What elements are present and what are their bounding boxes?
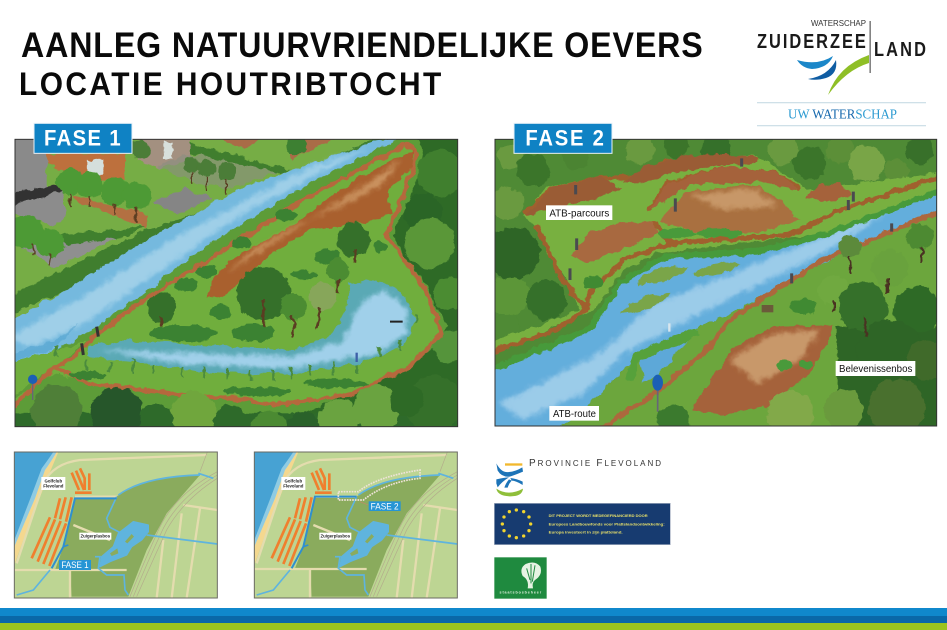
lower mound [689,324,833,415]
title: AANLEG NATUURVRIENDELIJKE OEVERS [21,27,703,65]
logo: Provincie Flevoland: PROVINCIE FLEVOLAND [529,458,661,469]
map label: Golfclub Flevoland: Flevoland [283,484,304,489]
fase 2 label [514,123,612,153]
map label: Zuigerplasbos [79,533,111,540]
map label: Golfclub Flevoland: Flevoland [43,484,64,489]
logo: Waterschap Zuiderzeeland [757,18,926,126]
map label: Golfclub Flevoland [41,477,65,490]
logo: Waterschap Zuiderzeeland: UW WATERSCHAP [788,106,897,122]
label: ATB-route [549,406,599,421]
logo: Waterschap Zuiderzeeland: WATERSCHAP [811,18,866,28]
title: LOCATIE HOUTRIBTOCHT [19,66,441,102]
map: fase 1 [14,452,217,598]
reeds [57,313,417,380]
map label: fase 2: FASE 2 [371,501,399,511]
mounds [525,155,852,290]
map label: Golfclub Flevoland [281,477,305,490]
foreground trees [16,384,400,426]
foreground bushes [657,248,925,438]
forest lower right [790,223,936,426]
canal [7,137,402,363]
logo: Waterschap Zuiderzeeland: ZUIDERZEE [757,29,866,52]
map: fase 2 [254,452,457,598]
map label: Golfclub Flevoland: Golfclub [285,478,302,483]
panel: fase 2 illustration [487,123,947,438]
icon: EU stars [501,508,532,539]
map label: Golfclub Flevoland: Golfclub [45,478,62,483]
lower bank [560,212,936,426]
banner: EU financing: Europees Landbouwfonds voor Plattelandsontwikkeling: [549,522,665,527]
label: Belevenissenbos: Belevenissenbos [839,364,912,375]
pond [88,279,416,374]
label: Belevenissenbos [836,361,915,376]
forest background [496,140,934,322]
cyclists and route sign [28,322,403,400]
banner: EU financing: DIT PROJECT WORDT MEDEGEFINANCIERD DOOR [549,513,648,518]
logo: Waterschap Zuiderzeeland: LAND [874,37,926,60]
map label: Zuigerplasbos [319,533,351,540]
map label: Zuigerplasbos: Zuigerplasbos [81,534,111,539]
banner: EU financing: Europa investeert in zijn platteland. [549,530,623,535]
bushes and trees on island [67,210,386,396]
canal [496,194,936,426]
map label: Zuigerplasbos: Zuigerplasbos [321,534,351,539]
cyclists and route sign [570,158,892,412]
footer stripes [0,608,947,630]
banner: EU financing [494,503,670,545]
logo: Staatsbosbeheer: staatsbosbeheer [499,591,542,595]
panel: fase 1 illustration [14,123,458,428]
title [19,27,703,102]
map label: fase 1: FASE 1 [61,560,89,570]
forest right [306,140,458,414]
mountain bike track area [487,155,947,357]
mound [207,151,413,298]
label: ATB-route: ATB-route [553,409,596,420]
lake [100,522,148,567]
label: ATB-parcours: ATB-parcours [549,208,609,219]
lake [340,522,388,567]
logo: Provincie Flevoland [496,458,661,496]
fase 1 label [34,123,132,153]
fase 2 label: FASE 2 [525,127,604,151]
logo: Staatsbosbeheer [494,557,547,599]
land and path [7,143,443,415]
fase 1 label: FASE 1 [44,127,121,151]
residential area [16,140,384,318]
